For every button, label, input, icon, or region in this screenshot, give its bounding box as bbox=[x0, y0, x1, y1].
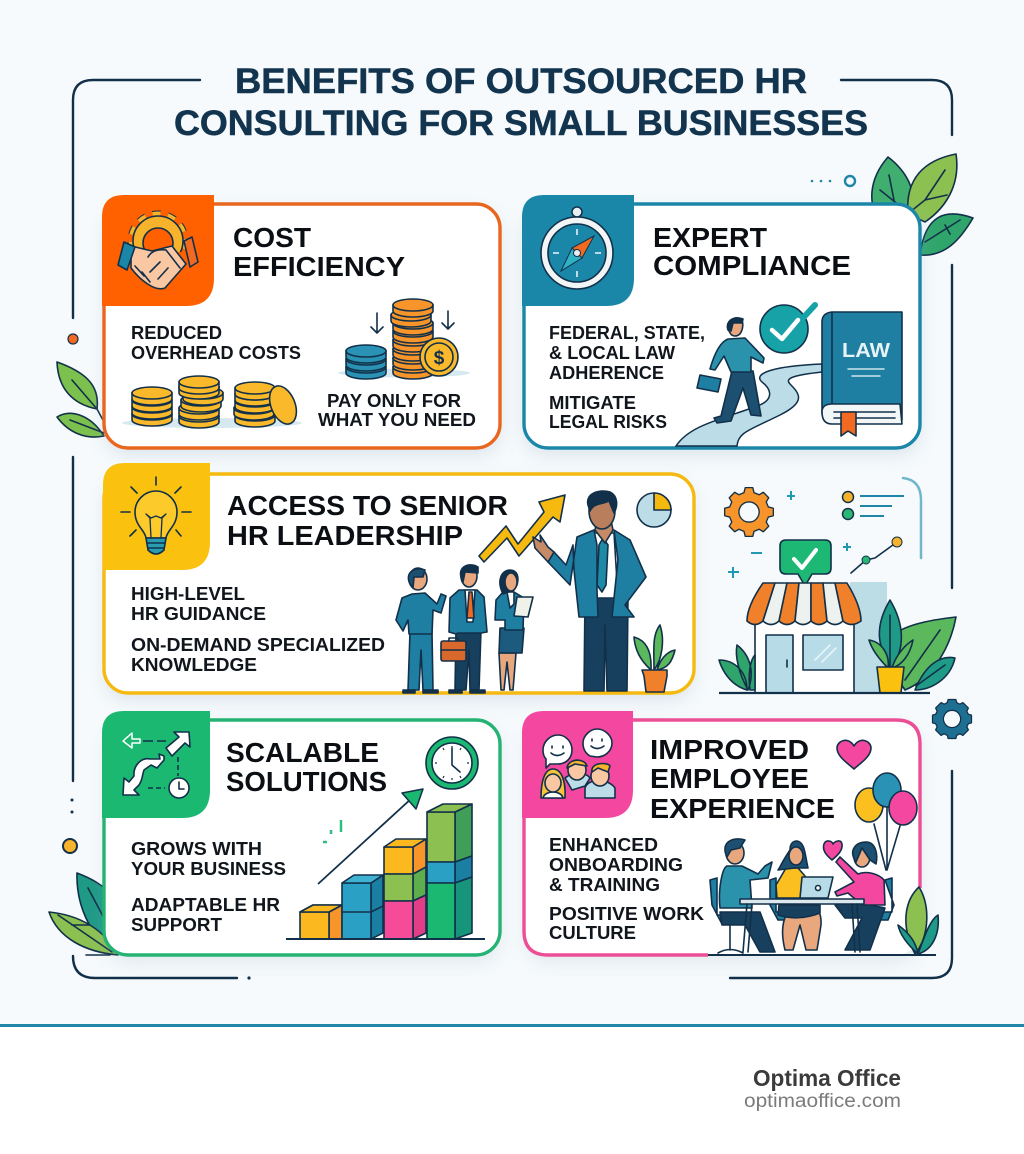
illustration: plant bbox=[898, 887, 938, 954]
chart: growing stacked bars bbox=[300, 804, 472, 939]
heading: HR LEADERSHIP bbox=[227, 520, 463, 551]
card shadow bbox=[105, 482, 693, 700]
title bbox=[174, 61, 868, 143]
text: high-level hr guidance bbox=[131, 584, 266, 624]
text: mitigate legal risks: MITIGATE bbox=[549, 393, 636, 413]
heading: SOLUTIONS bbox=[226, 766, 387, 797]
card body bbox=[524, 204, 920, 448]
icon: clock bbox=[426, 737, 478, 789]
text: law adherence: & LOCAL LAW bbox=[549, 343, 675, 363]
icon tab bbox=[102, 195, 214, 306]
illustration: team at a table bbox=[710, 839, 894, 953]
text: adaptable hr support: ADAPTABLE HR bbox=[131, 895, 280, 915]
text: law adherence: ADHERENCE bbox=[549, 363, 664, 383]
text: positive work culture: POSITIVE WORK bbox=[549, 904, 704, 924]
sparkles bbox=[728, 491, 851, 578]
card border bbox=[524, 720, 920, 955]
light backdrop bbox=[850, 582, 887, 693]
icon: pie chart bbox=[637, 493, 671, 527]
card body bbox=[104, 474, 694, 693]
text: pay only for what you need: WHAT YOU NEED bbox=[318, 410, 476, 430]
text: mitigate legal risks: LEGAL RISKS bbox=[549, 412, 667, 432]
illustration: person walking the path to the law book bbox=[676, 305, 902, 446]
heading: EMPLOYEE bbox=[650, 763, 809, 794]
small decorative dots bbox=[63, 176, 855, 980]
text: positive work culture bbox=[549, 904, 704, 943]
illustration: senior leader bbox=[533, 491, 646, 691]
text: on-demand specialized knowledge: ON-DEMAND SPECIALIZED bbox=[131, 635, 385, 655]
shop building bbox=[755, 620, 854, 693]
card shadow bbox=[105, 212, 500, 455]
growth arrow bbox=[318, 789, 423, 884]
heading: EXPERT bbox=[653, 222, 767, 253]
icon: scaling arrows bbox=[123, 732, 190, 798]
footer bbox=[0, 1024, 1024, 1154]
title: CONSULTING FOR SMALL BUSINESSES bbox=[174, 103, 868, 143]
heading bbox=[650, 734, 835, 824]
heading: SCALABLE bbox=[226, 737, 379, 768]
illustration: potted plant bbox=[634, 625, 675, 692]
checklist lines bbox=[842, 492, 904, 520]
icon tab bbox=[522, 711, 633, 818]
orange gear bbox=[725, 488, 773, 536]
text: high-level hr guidance: HR GUIDANCE bbox=[131, 604, 266, 624]
leaves: left bbox=[57, 362, 104, 437]
text: law adherence: FEDERAL, STATE, bbox=[549, 323, 705, 343]
law book bbox=[822, 312, 902, 436]
brand url: optimaoffice.com bbox=[744, 1091, 901, 1112]
left shop plant bbox=[719, 645, 755, 690]
heading bbox=[233, 222, 405, 282]
icon tab bbox=[102, 711, 210, 818]
card fill bbox=[524, 720, 920, 955]
illustration: team of three bbox=[396, 565, 533, 693]
footer background bbox=[0, 1027, 1024, 1154]
person bbox=[697, 318, 764, 423]
illustration: savings coins: $ bbox=[434, 348, 445, 369]
panel: cost efficiency bbox=[102, 195, 500, 455]
text: enhanced onboarding and training bbox=[549, 835, 683, 895]
panel: expert compliance bbox=[522, 195, 920, 455]
icon: rising yellow arrow bbox=[479, 495, 565, 562]
mini line chart bbox=[851, 537, 902, 573]
text: positive work culture: CULTURE bbox=[549, 923, 636, 943]
leaves: bottom left bbox=[49, 873, 118, 955]
icon: handshake and gear bbox=[118, 214, 198, 289]
icon: compass bbox=[541, 207, 613, 289]
icon tab bbox=[522, 195, 634, 306]
striped awning bbox=[747, 583, 861, 624]
text: pay only for what you need: PAY ONLY FOR bbox=[327, 391, 461, 411]
text: adaptable hr support bbox=[131, 895, 280, 935]
chart baseline bbox=[286, 938, 485, 940]
law book: LAW bbox=[842, 340, 890, 362]
text: mitigate legal risks bbox=[549, 393, 667, 432]
text: reduced overhead costs: REDUCED bbox=[131, 323, 222, 343]
small growth marks bbox=[323, 820, 341, 842]
illustration: savings coins bbox=[338, 299, 470, 379]
heading: ACCESS TO SENIOR bbox=[227, 490, 508, 521]
card body bbox=[104, 720, 500, 955]
text: grows with your business: GROWS WITH bbox=[131, 839, 262, 859]
person three bbox=[495, 570, 533, 690]
title: BENEFITS OF OUTSOURCED HR bbox=[235, 61, 807, 101]
person one bbox=[396, 568, 446, 693]
heading: IMPROVED bbox=[650, 734, 809, 765]
leaves: top right bbox=[872, 154, 973, 255]
text: high-level hr guidance: HIGH-LEVEL bbox=[131, 584, 245, 604]
text: grows with your business bbox=[131, 839, 286, 879]
person two bbox=[441, 565, 487, 693]
heading: COMPLIANCE bbox=[653, 250, 851, 281]
text: reduced overhead costs bbox=[131, 323, 301, 363]
text: on-demand specialized knowledge: KNOWLEDGE bbox=[131, 655, 257, 675]
icon: light bulb bbox=[121, 477, 191, 554]
card body bbox=[104, 204, 500, 448]
panel: scalable solutions bbox=[102, 711, 500, 962]
text: on-demand specialized knowledge bbox=[131, 635, 385, 675]
decorative frame bbox=[73, 80, 952, 978]
green check tag bbox=[780, 540, 831, 586]
card shadow bbox=[526, 728, 920, 962]
text: pay only for what you need bbox=[318, 391, 476, 430]
card shadow bbox=[106, 728, 500, 962]
right shop plant bbox=[869, 600, 956, 693]
heading: COST bbox=[233, 222, 311, 253]
heading bbox=[226, 737, 387, 797]
icon: blue gear bbox=[932, 700, 972, 738]
text: enhanced onboarding and training: ENHANCED bbox=[549, 835, 658, 855]
heading bbox=[653, 222, 851, 281]
heading bbox=[227, 490, 508, 551]
illustration: coin stacks bbox=[122, 376, 302, 428]
text: law adherence bbox=[549, 323, 705, 383]
icon: happy employees bbox=[541, 729, 615, 798]
footer rule bbox=[0, 1024, 1024, 1027]
text: grows with your business: YOUR BUSINESS bbox=[131, 859, 286, 879]
text: adaptable hr support: SUPPORT bbox=[131, 915, 222, 935]
illustration: small business storefront bbox=[719, 478, 956, 693]
text: reduced overhead costs: OVERHEAD COSTS bbox=[131, 343, 301, 363]
heading: EXPERIENCE bbox=[650, 793, 835, 824]
check badge bbox=[760, 305, 815, 353]
card shadow bbox=[524, 212, 920, 455]
ground line bbox=[708, 954, 936, 956]
ground line bbox=[719, 692, 930, 694]
teal corner curve bbox=[903, 478, 921, 558]
icon tab bbox=[103, 463, 210, 570]
panel: access to senior hr leadership bbox=[103, 463, 694, 700]
panel: improved employee experience bbox=[522, 711, 938, 962]
text: enhanced onboarding and training: & TRAINING bbox=[549, 875, 660, 895]
icon: heart bbox=[837, 740, 871, 769]
heading: EFFICIENCY bbox=[233, 251, 405, 282]
brand name: Optima Office bbox=[753, 1065, 901, 1091]
text: enhanced onboarding and training: ONBOARDING bbox=[549, 855, 683, 875]
icon: balloons bbox=[855, 773, 917, 870]
